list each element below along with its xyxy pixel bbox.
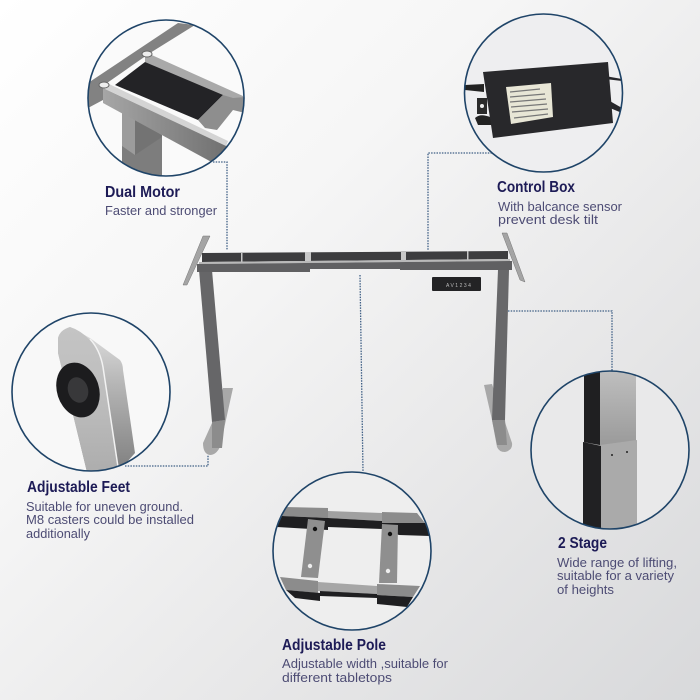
cross pieces [241,251,468,262]
left mounting bracket [183,236,210,285]
panel: adjustable feet [12,313,194,541]
heading: Adjustable Feet [27,479,131,496]
top frame back rail [202,251,508,262]
back long bar [145,55,243,98]
dotted connector: adjustable feet [125,455,208,466]
right foot [484,384,512,452]
description: additionally [26,527,91,541]
handset keypad [432,277,481,291]
photo: dual motor frame [85,18,247,180]
dotted connector: adjustable pole [360,275,363,472]
black leveller knob [56,362,100,418]
cross bracket [198,95,245,130]
circle border [273,472,431,630]
description: suitable for a variety [557,569,675,583]
dotted connector: control box [428,153,492,250]
label sticker [506,83,553,124]
panel: control box [464,14,624,227]
photo: two-stage column [583,372,688,528]
back rail [282,507,328,518]
dotted connector: dual motor [213,162,227,250]
heading: Dual Motor [105,184,180,201]
photo: control box [465,62,621,138]
circle border [88,20,244,176]
right leg [492,270,509,420]
description: Suitable for uneven ground. [26,500,183,514]
desk frame illustration [183,233,525,455]
photo: adjustable pole rails [278,507,430,628]
circle border [531,371,689,529]
heading: 2 Stage [558,535,607,552]
description: different tabletops [282,671,392,685]
panel: dual motor [85,18,247,218]
description: prevent desk tilt [498,213,599,227]
panel: 2 stage [530,370,690,597]
top frame front beam [197,261,512,272]
description: of heights [557,583,614,597]
front beam [103,88,227,165]
circle border [12,313,170,471]
circle border [464,14,622,172]
top frame front light bar [199,259,510,264]
description: M8 casters could be installed [26,513,194,527]
panel: adjustable pole [272,471,448,685]
dotted connector: 2 stage [508,311,612,371]
heading: Control Box [497,179,575,196]
black plate [115,62,223,120]
cross plates [301,519,325,578]
column [122,114,135,155]
right mounting bracket [502,233,525,282]
description: With balcance sensor [498,200,622,214]
left leg [199,270,225,422]
front rail [318,582,377,594]
left foot [203,388,233,455]
handset keypad: AV1234 [446,283,472,289]
photo: foot with leveller [56,327,135,470]
description: Faster and stronger [105,204,217,218]
description: Wide range of lifting, [557,556,677,570]
cross bar [85,23,195,108]
description: Adjustable width ,suitable for [282,657,448,671]
heading: Adjustable Pole [282,637,386,654]
